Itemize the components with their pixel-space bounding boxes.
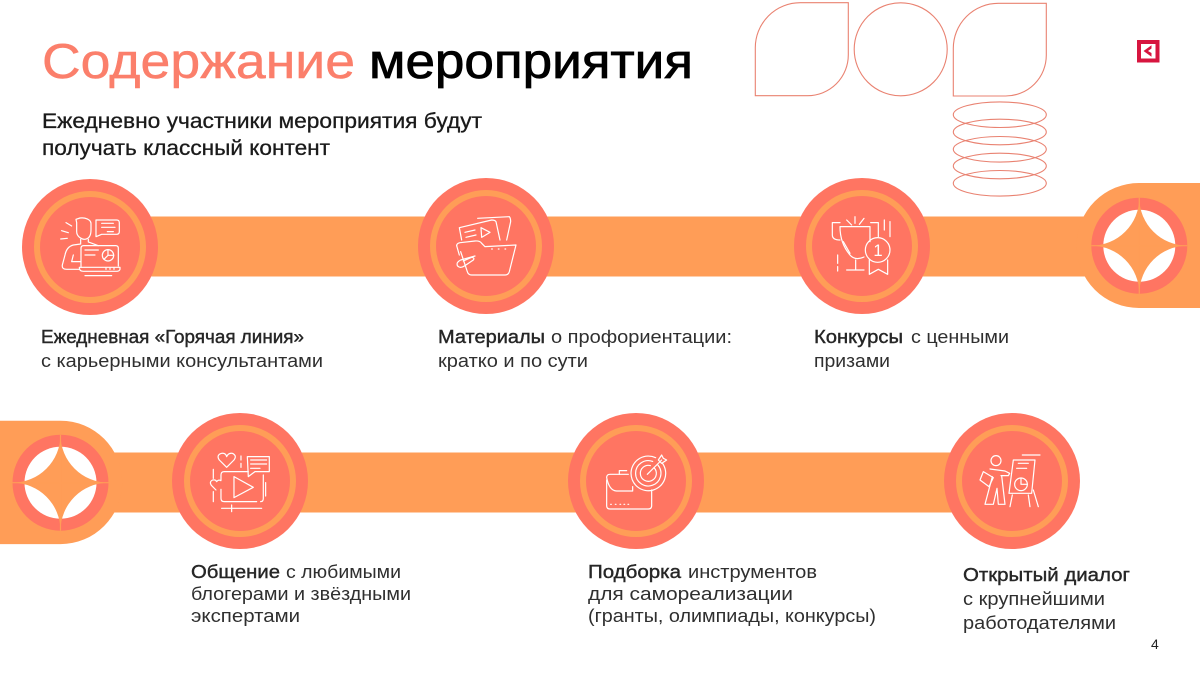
icon: video with hearts	[210, 453, 269, 512]
caption: hot line: Ежедневная «Горячая линия»	[41, 326, 304, 347]
node: materials	[418, 178, 554, 314]
caption: tools: инструментов	[688, 561, 817, 582]
caption: tools: для самореализации	[588, 583, 793, 604]
subtitle: Ежедневно участники мероприятия будут	[42, 110, 482, 133]
caption: materials: Материалы	[438, 326, 545, 347]
title: Содержание	[42, 35, 355, 89]
node: hot line	[22, 179, 158, 315]
bottom band	[60, 452, 1012, 512]
caption: tools: (гранты, олимпиады, конкурсы)	[588, 605, 876, 626]
subtitle	[42, 110, 482, 160]
icon: briefcase with target	[607, 455, 667, 509]
caption: dialogue: с крупнейшими	[963, 588, 1105, 609]
logo	[1139, 42, 1158, 60]
title: мероприятия	[369, 35, 693, 89]
decorative outline shapes	[755, 3, 1046, 196]
subtitle: получать классный контент	[42, 137, 330, 160]
caption: dialogue: работодателями	[963, 612, 1116, 633]
node: bloggers	[172, 413, 308, 549]
caption: materials: кратко и по сути	[438, 350, 588, 371]
icon: folder with documents	[457, 217, 516, 275]
caption: bloggers: блогерами и звёздными	[191, 583, 411, 604]
left end cap	[0, 421, 122, 544]
caption: dialogue: Открытый диалог	[963, 564, 1130, 585]
caption: tools	[588, 561, 876, 626]
caption: contests: с ценными	[911, 326, 1009, 347]
icon: trophy with medal: 1	[873, 241, 883, 260]
caption: contests: Конкурсы	[814, 326, 903, 347]
caption: contests	[814, 326, 1009, 371]
right end cap	[1076, 183, 1200, 308]
caption: tools: Подборка	[588, 561, 682, 582]
caption: materials	[438, 326, 732, 371]
caption: contests: призами	[814, 350, 890, 371]
node: dialogue	[944, 413, 1080, 549]
node: contests	[794, 178, 930, 314]
caption: bloggers	[191, 561, 411, 626]
caption: hot line: с карьерными консультантами	[41, 350, 323, 371]
caption: bloggers: Общение	[191, 561, 280, 582]
icon: consultant with laptop	[61, 218, 120, 276]
title	[42, 35, 693, 89]
caption: bloggers: с любимыми	[286, 561, 401, 582]
caption: dialogue	[963, 564, 1130, 633]
top band	[90, 216, 1100, 276]
page number: 4	[1151, 636, 1159, 652]
caption: bloggers: экспертами	[191, 605, 300, 626]
node: tools	[568, 413, 704, 549]
caption: materials: о профориентации:	[551, 326, 732, 347]
caption: hot line	[41, 326, 323, 371]
icon: presenter at flipchart	[980, 455, 1040, 507]
